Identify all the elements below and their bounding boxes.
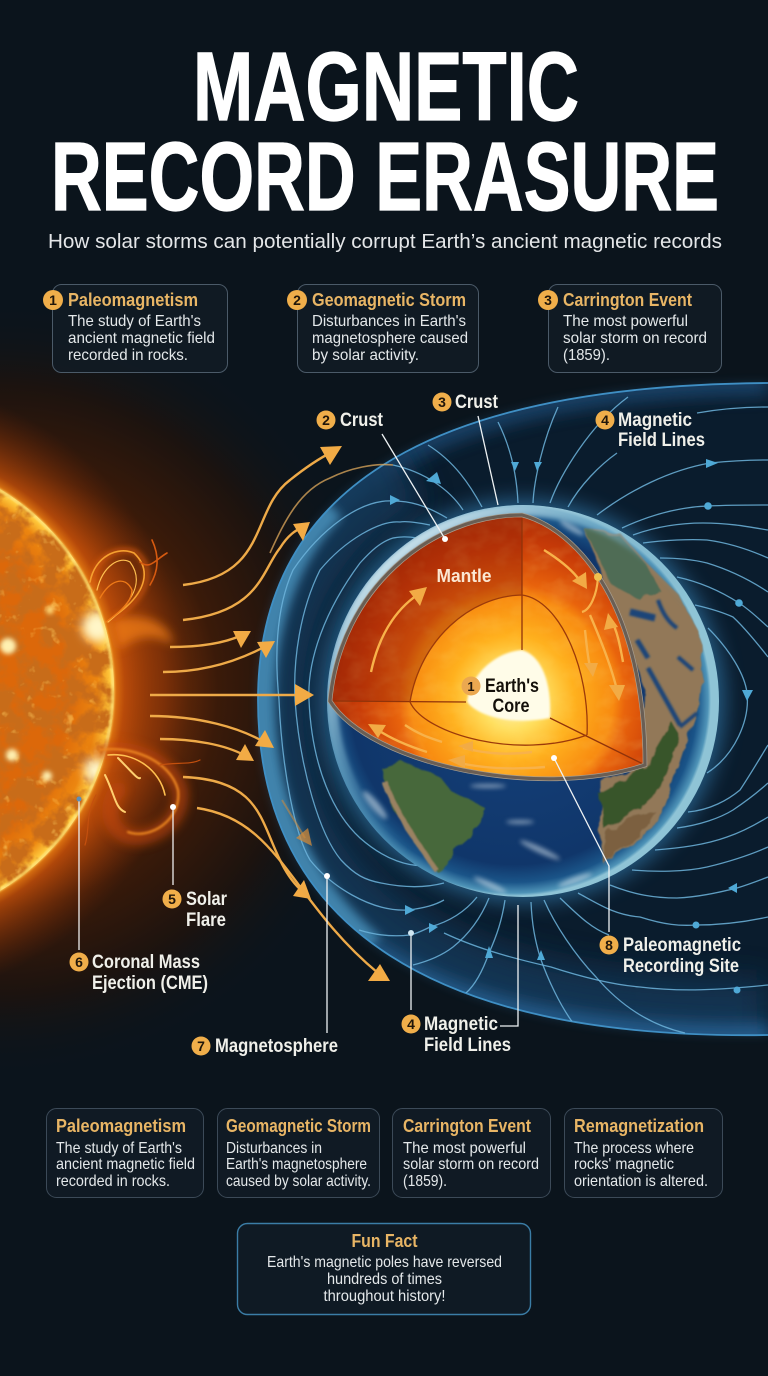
card: Remagnetization [564,1108,722,1198]
title [51,32,719,231]
callout: 7 Magnetosphere: Magnetosphere [215,1036,338,1057]
card: Paleomagnetism: The study of Earth's [68,313,201,330]
card: Geomagnetic Storm: by solar activity. [312,347,419,364]
cutaway [328,512,648,782]
callout: 6 Coronal Mass Ejection: 6 [75,954,83,970]
label: Mantle: Mantle [436,566,492,586]
callout: 4 Magnetic Field Lines bottom: Field Lines [424,1035,511,1056]
card: Geomagnetic Storm: Geomagnetic Storm [312,289,466,310]
card: Carrington Event [538,284,722,372]
callout: 3 Crust [432,392,499,505]
card: Geomagnetic Storm: Earth's magnetosphere [226,1156,367,1173]
prominence: upper loop [90,540,173,650]
title: MAGNETIC [193,32,579,141]
callout: 4 Magnetic Field Lines bottom [402,905,518,1056]
card: Carrington Event: solar storm on record [403,1156,539,1173]
callout: 4 Magnetic Field Lines bottom: Magnetic [424,1014,498,1035]
card: Geomagnetic Storm [218,1108,380,1198]
callout: 2 Crust: 2 [322,412,330,428]
card: Paleomagnetism [43,284,228,372]
callout: 4 Magnetic Field Lines top: 4 [601,412,609,428]
card: Paleomagnetism [46,1108,204,1198]
callout: 4 Magnetic Field Lines top [596,410,705,451]
card: Remagnetization: orientation is altered. [574,1173,708,1190]
callout: 4 Magnetic Field Lines top: Magnetic [618,410,692,431]
card: Geomagnetic Storm [287,284,478,372]
callout: 4 Magnetic Field Lines bottom: 4 [407,1016,415,1032]
card: Paleomagnetism: recorded in rocks. [56,1173,170,1190]
card: Paleomagnetism: Paleomagnetism [68,289,198,310]
card: Geomagnetic Storm: caused by solar activity. [226,1173,371,1190]
callout: 7 Magnetosphere: 7 [197,1038,205,1054]
callout: 6 Coronal Mass Ejection: Ejection (CME) [92,973,208,994]
field direction markers [390,459,753,994]
callout: 3 Crust: 3 [438,394,446,410]
callout: 8 Paleomagnetic Recording Site [551,573,741,977]
prominence: lower loop [85,749,200,845]
callout: 3 Crust: Crust [455,392,499,413]
card: Carrington Event: Carrington Event [403,1115,531,1136]
card: Geomagnetic Storm: Geomagnetic Storm [226,1115,371,1136]
card: Geomagnetic Storm: Disturbances in Earth's [312,313,466,330]
continent: Eurasia and Africa [585,530,702,863]
clouds and polar ice [327,505,667,832]
convection arrows [368,550,625,768]
panel: bottom glossary [46,1108,722,1198]
earth glow [321,499,725,903]
continent: South America [380,760,485,872]
magnetic field lines [277,397,768,1033]
label: Earth's Core: Earth's [485,676,539,697]
callout: 5 Solar Flare [162,804,228,931]
subtitle: How solar storms can potentially corrupt Earth’s ancient magnetic records [48,230,722,253]
label: Earth's Core: Core [492,696,530,717]
card: Carrington Event: Carrington Event [563,289,692,310]
callout: 5 Solar Flare: 5 [168,891,176,907]
callout: 6 Coronal Mass Ejection [70,796,208,994]
card: Carrington Event: (1859). [403,1173,447,1190]
card: Remagnetization: Remagnetization [574,1115,704,1136]
panel: fun fact: throughout history! [324,1288,446,1305]
callout: 2 Crust [316,410,448,542]
callout: 4 Magnetic Field Lines top: Field Lines [618,430,705,451]
panel: fun fact: Earth's magnetic poles have reversed [267,1254,502,1271]
card: Paleomagnetism: recorded in rocks. [68,347,188,364]
card: Paleomagnetism: The study of Earth's [56,1140,182,1157]
solar wind arrows [150,446,393,981]
seas [630,600,697,727]
card: Carrington Event: solar storm on record [563,330,707,347]
callout: 7 Magnetosphere [192,873,338,1057]
callout: 8 Paleomagnetic Recording Site: 8 [605,937,613,953]
callout: 5 Solar Flare: Flare [186,910,226,931]
card: Carrington Event: The most powerful [563,313,688,330]
sun disc [0,456,114,924]
panel: top definitions [43,284,722,372]
panel: fun fact: hundreds of times [327,1271,442,1288]
card: Carrington Event: The most powerful [403,1140,526,1157]
panel: fun fact: Fun Fact [352,1230,418,1251]
card: Geomagnetic Storm: Disturbances in [226,1140,322,1157]
callout: 2 Crust: Crust [340,410,384,431]
callout: 5 Solar Flare: Solar [186,889,228,910]
sun [0,413,201,967]
card: Remagnetization: The process where [574,1140,694,1157]
card: Geomagnetic Storm: magnetosphere caused [312,330,468,347]
card: Paleomagnetism: ancient magnetic field [68,330,215,347]
panel: fun fact [238,1224,530,1314]
card: Paleomagnetism: ancient magnetic field [56,1156,195,1173]
card: Paleomagnetism: 1 [49,292,57,308]
callout: 8 Paleomagnetic Recording Site: Paleomagnetic [623,935,741,956]
label: Earth's Core: 1 [467,679,475,694]
card: Paleomagnetism: Paleomagnetism [56,1115,186,1136]
card: Geomagnetic Storm: 2 [293,292,301,308]
callout: 8 Paleomagnetic Recording Site: Recording Site [623,956,739,977]
callout: 6 Coronal Mass Ejection: Coronal Mass [92,952,200,973]
earth globe [325,505,719,897]
card: Carrington Event [392,1108,550,1198]
card: Remagnetization: rocks' magnetic [574,1156,674,1173]
card: Carrington Event: 3 [544,292,552,308]
card: Carrington Event: (1859). [563,347,610,364]
magnetosphere [258,383,768,1035]
label: Earth's Core [462,676,539,717]
